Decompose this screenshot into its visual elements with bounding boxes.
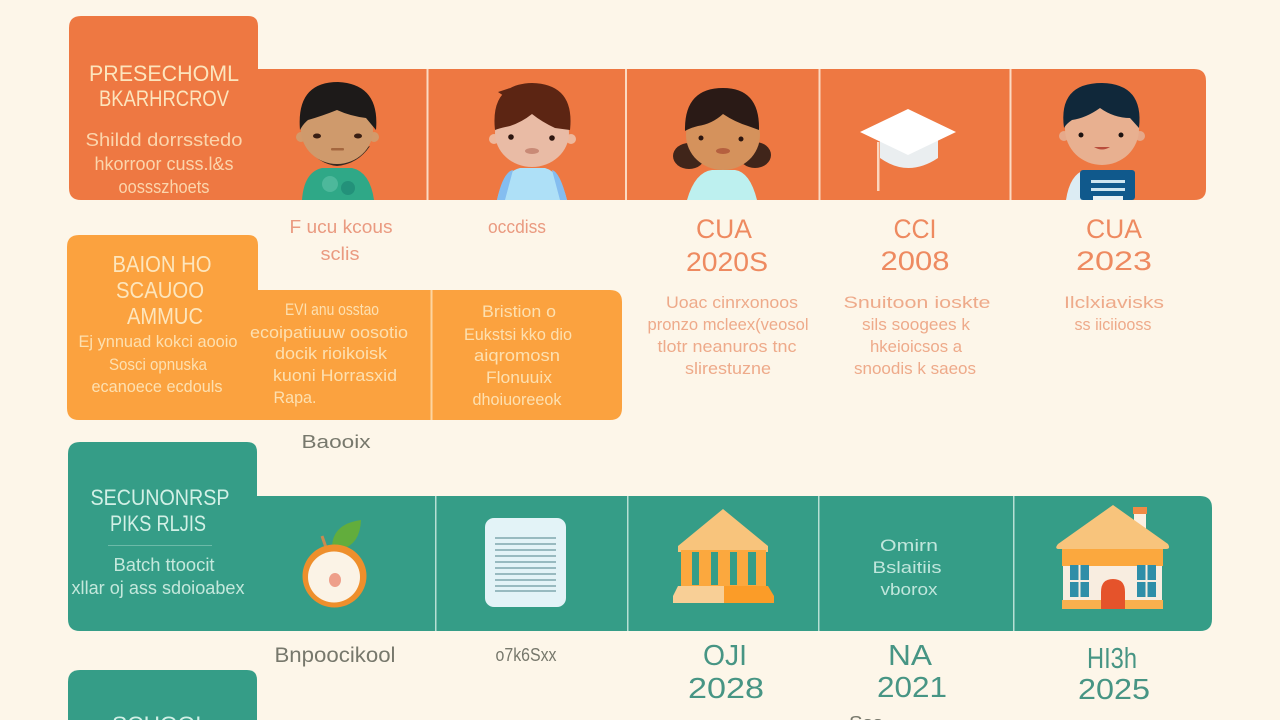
heading: secondary: PIKS RLJIS [110, 511, 206, 536]
text block: column three notes: slirestuzne [685, 359, 771, 378]
text block: column three notes: Uoac cinrxonoos [666, 293, 798, 312]
text block: column five notes: ss iiciiooss [1074, 315, 1152, 334]
labels: preschool row captions: CUA [696, 214, 752, 244]
text block: column three notes: pronzo mcleex(veosol [648, 315, 808, 334]
text block: primary column three: aiqromosn [474, 346, 560, 365]
text block: primary description [78, 332, 238, 396]
labels: secondary row captions: 2025 [1078, 674, 1150, 706]
text block: column four notes: sils soogees k [862, 315, 970, 334]
text block: primary column three: Eukstsi kko dio [464, 325, 572, 344]
text block: primary column three: Flonuuix [486, 368, 553, 387]
panel: secondary row [68, 442, 1212, 631]
labels: secondary row captions: OJI [703, 640, 747, 672]
amber panel shape [67, 235, 622, 420]
teal panel shape [68, 442, 1212, 631]
text block: column five notes [1064, 293, 1164, 334]
heading: primary [112, 251, 212, 329]
icon: child with brown hair and blue shirt [489, 83, 576, 200]
labels: secondary row captions: 2021 [877, 672, 947, 704]
labels: secondary row captions: NA [888, 640, 933, 672]
labels: preschool row captions: sclis [320, 244, 360, 264]
text block: secondary column four: Omirn [880, 536, 938, 555]
text block: primary description: Ej ynnuad kokci aooio [78, 332, 238, 351]
labels: preschool row captions: 2023 [1076, 246, 1152, 276]
heading: primary: AMMUC [127, 303, 203, 329]
text block: primary description: ecanoece ecdouls [92, 377, 222, 396]
text block: preschool description [86, 130, 242, 197]
text block: secondary column four [872, 536, 942, 599]
text block: primary column three: dhoiuoreeok [472, 390, 562, 409]
panel: preschool row [69, 16, 1206, 200]
panel: primary row [67, 235, 622, 420]
text block: column four notes [844, 293, 990, 378]
heading: secondary [90, 485, 230, 536]
labels: preschool row captions: 2008 [880, 246, 950, 276]
text block: column four notes: Snuitoon ioskte [844, 293, 990, 312]
heading: primary: BAION HO [112, 251, 212, 277]
labels: secondary row captions: o7k6Sxx [496, 645, 556, 665]
labels: preschool row captions: CUA [1086, 214, 1142, 244]
text block: preschool description: Shildd dorrsstedo [86, 130, 242, 150]
heading: preschool: PRESECHOML [89, 61, 239, 86]
text block: column five notes: Ilclxiavisks [1064, 293, 1164, 312]
heading: primary: SCAUOO [116, 277, 204, 303]
label: primary caption: Baooix [302, 432, 370, 452]
labels: preschool row captions [290, 214, 1152, 277]
text block: primary column two: ecoipatiuuw oosotio [250, 323, 408, 342]
heading: secondary: SECUNONRSP [90, 485, 230, 510]
text block: column three notes: tlotr neanuros tnc [658, 337, 797, 356]
icon: child holding blue book [1059, 83, 1145, 200]
text block: secondary description [72, 555, 245, 598]
labels: preschool row captions: F ucu kcous [290, 217, 392, 237]
text block: secondary description: xllar oj ass sdoioabex [72, 578, 245, 598]
icon: child with black hair and teal shirt [296, 82, 379, 200]
labels: secondary row captions: Bnpoocikool [274, 644, 396, 667]
text block: column four notes: snoodis k saeos [854, 359, 976, 378]
orange panel shape [69, 16, 1206, 200]
text block: primary column two: docik rioikoisk [275, 344, 388, 363]
text block: secondary description: Batch ttoocit [114, 555, 214, 575]
text block: primary description: Sosci opnuska [109, 355, 207, 374]
icon: apple [302, 520, 366, 608]
icon: columned building [673, 509, 774, 603]
panel: next row, cut off at the page edge [68, 670, 257, 720]
text block: primary column three: Bristion o [482, 302, 556, 321]
text block: primary column two: kuoni Horrasxid [273, 366, 397, 385]
heading: preschool: BKARHRCROV [99, 86, 229, 111]
text block: primary column three [464, 302, 572, 409]
text block: preschool description: oossszhoets [118, 177, 210, 197]
text block: primary column two: EVI anu osstao [285, 300, 379, 319]
labels: secondary row captions: HI3h [1087, 643, 1137, 675]
labels: secondary row captions: 2028 [688, 673, 764, 705]
text block: column three notes [648, 293, 808, 378]
labels: secondary row captions [274, 640, 1150, 706]
icon: graduation cap [860, 109, 956, 191]
labels: preschool row captions: 2020S [686, 247, 768, 277]
text block: secondary column four: vborox [880, 580, 938, 599]
text block: preschool description: hkorroor cuss.l&s [94, 154, 234, 174]
icon: document [485, 518, 566, 607]
text block: secondary column four: Bslaitiis [872, 558, 942, 577]
icon: house [1056, 505, 1169, 609]
text block: primary column two: Rapa. [274, 388, 316, 407]
text block: column four notes: hkeioicsos a [870, 337, 963, 356]
icon: child with curly hair and pale shirt [673, 88, 771, 200]
heading: preschool [89, 61, 239, 111]
text block: primary column two [250, 300, 408, 407]
labels: preschool row captions: occdiss [488, 217, 546, 237]
labels: preschool row captions: CCI [894, 214, 936, 244]
